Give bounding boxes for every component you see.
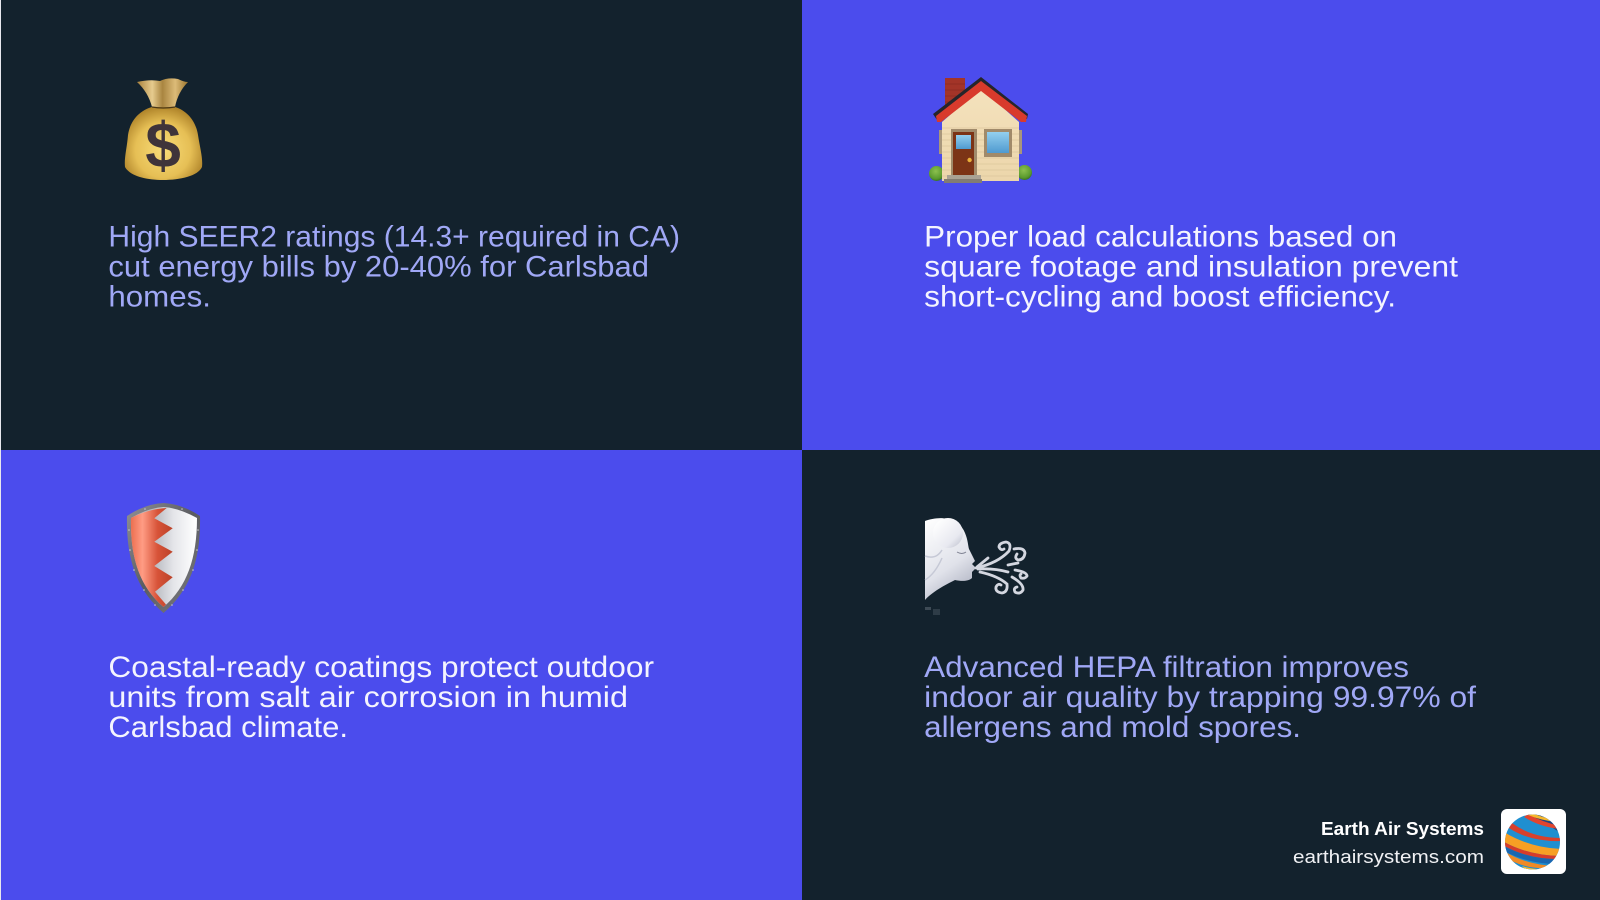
logo bbox=[1501, 809, 1566, 874]
text: coastal protection: units from salt air corrosion in humid bbox=[108, 681, 628, 714]
text: coastal protection: Carlsbad climate. bbox=[108, 711, 348, 744]
text: air quality: indoor air quality by trapping 99.97% of bbox=[924, 681, 1477, 714]
text: load calculations: Proper load calculations based on bbox=[924, 221, 1397, 254]
icon: money bag bbox=[125, 78, 202, 181]
text: energy savings: cut energy bills by 20-40% for Carlsbad bbox=[108, 251, 649, 284]
brand name: Earth Air Systems bbox=[1321, 818, 1484, 839]
brand url: earthairsystems.com bbox=[1293, 846, 1484, 867]
text: load calculations: square footage and insulation prevent bbox=[924, 251, 1458, 284]
icon: blowing wind face bbox=[925, 518, 1027, 615]
panel: coastal protection bbox=[1, 450, 802, 900]
icon: money bag: $ bbox=[145, 109, 181, 181]
text: air quality: allergens and mold spores. bbox=[924, 711, 1301, 744]
text: coastal protection: Coastal-ready coatings protect outdoor bbox=[108, 651, 654, 684]
panel: air quality bbox=[802, 450, 1600, 900]
icon: house bbox=[929, 77, 1032, 183]
icon: shield bbox=[127, 503, 200, 613]
text: energy savings: homes. bbox=[108, 281, 211, 314]
panel: load calculations bbox=[802, 0, 1600, 450]
text: energy savings: High SEER2 ratings (14.3+ required in CA) bbox=[108, 221, 680, 254]
panel: energy savings bbox=[1, 0, 802, 450]
text: air quality: Advanced HEPA filtration improves bbox=[924, 651, 1409, 684]
brand block bbox=[1293, 809, 1566, 874]
text: load calculations: short-cycling and boost efficiency. bbox=[924, 281, 1396, 314]
